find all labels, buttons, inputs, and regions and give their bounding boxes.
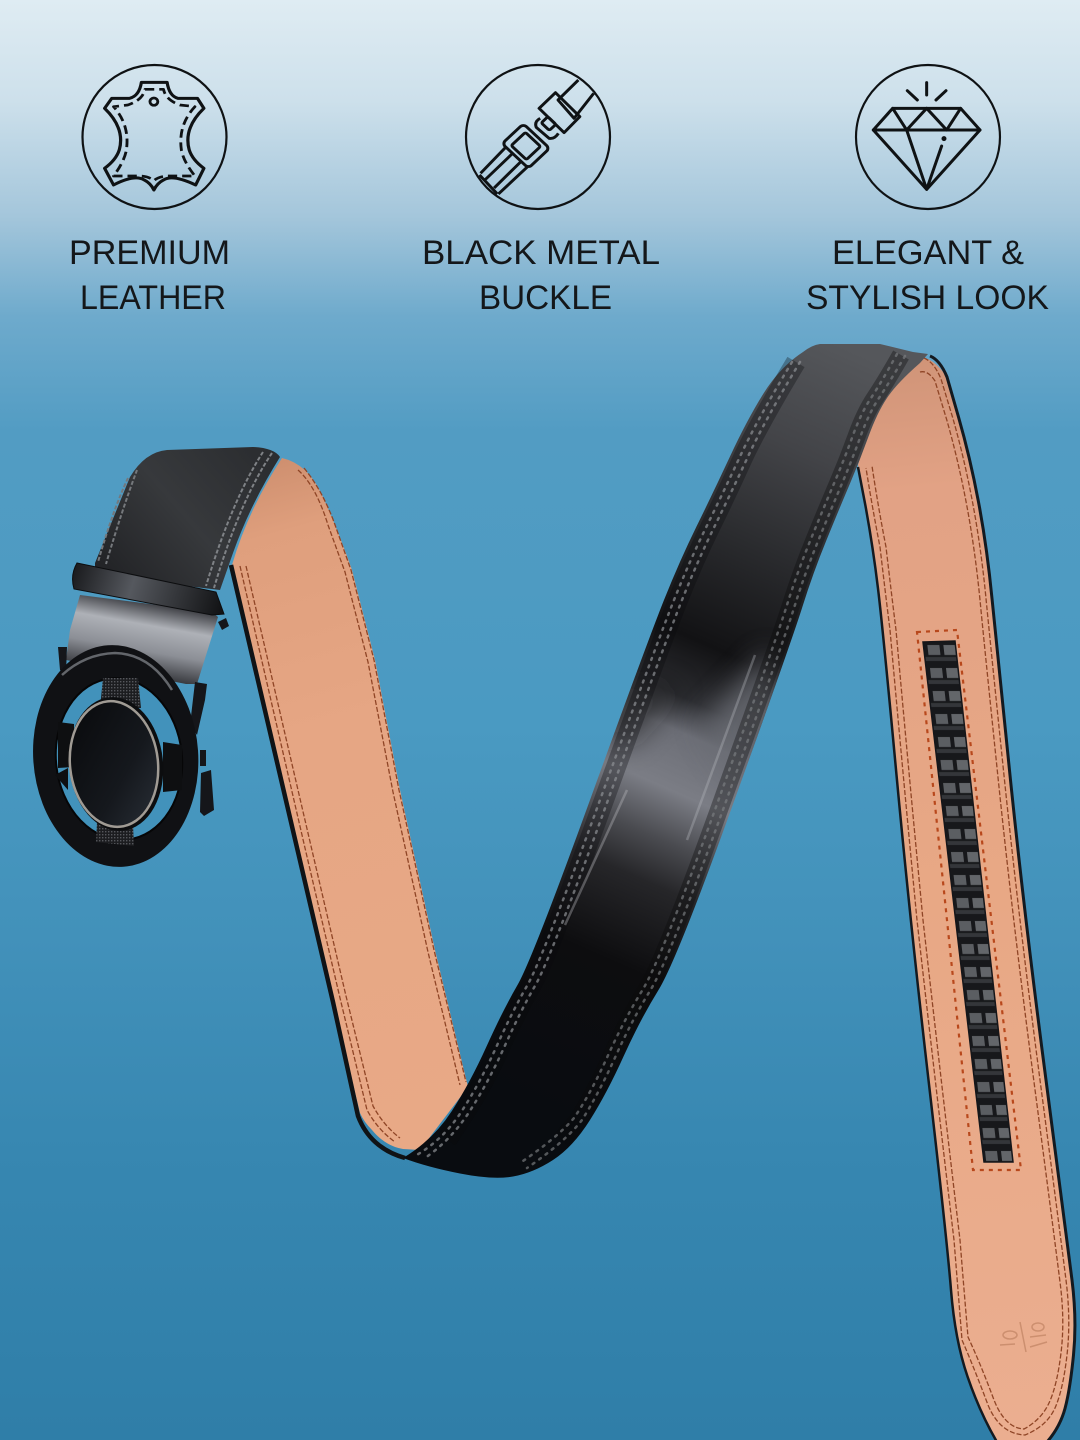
heading: elegant and stylish look: [806, 234, 1049, 317]
heading: premium leather: LEATHER: [80, 279, 226, 317]
belt strap: tan underside left: [231, 458, 468, 1158]
ratchet slot: [923, 641, 1013, 1162]
heading: black metal buckle: BUCKLE: [479, 279, 612, 317]
icon: leather hide: [82, 65, 226, 209]
buckle: [26, 563, 229, 872]
heading: black metal buckle: BLACK METAL: [422, 234, 660, 272]
heading: black metal buckle: [422, 234, 660, 317]
icon: belt buckle: [466, 65, 610, 209]
mesh spokes: [96, 678, 141, 846]
buckle top bar: [73, 563, 224, 615]
heading: elegant and stylish look: STYLISH LOOK: [806, 279, 1049, 317]
icon: diamond: [856, 65, 1000, 209]
belt strap: tan underside right with ratchet slot: [858, 356, 1075, 1440]
center oval: [64, 697, 164, 831]
belt strap: glossy black front: [403, 344, 928, 1178]
heading: premium leather: [69, 234, 230, 317]
heading: premium leather: PREMIUM: [69, 234, 230, 272]
heading: elegant and stylish look: ELEGANT &: [832, 234, 1024, 272]
rear bars: [55, 722, 182, 792]
oval backing: [62, 692, 170, 836]
maker's stamp: [1000, 1322, 1047, 1352]
buckle side arms and tab: [58, 618, 229, 816]
buckle plate: [66, 595, 218, 684]
buckle ring: [26, 640, 206, 872]
belt strap: black section above buckle: [95, 447, 280, 590]
